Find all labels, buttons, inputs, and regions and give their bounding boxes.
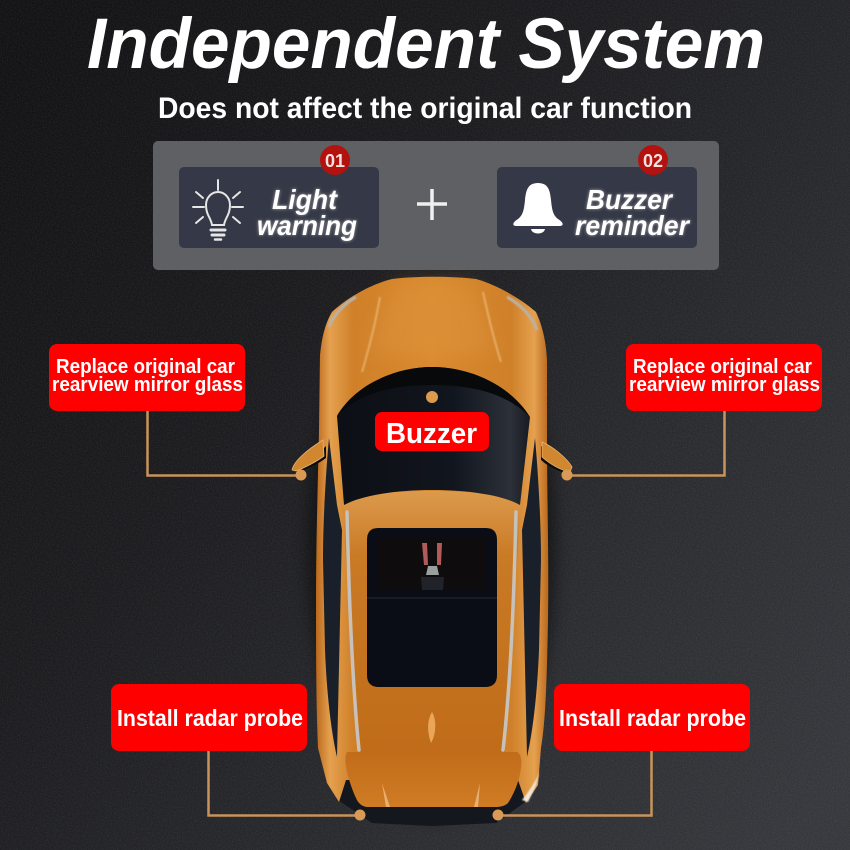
windshield [337,367,530,505]
hood highlight [368,283,495,358]
callout: left mirror [49,344,245,411]
side windows [323,438,541,757]
callout: right radar probe: Install radar probe [559,705,746,731]
connector: top left [148,411,306,480]
card: light warning [179,167,379,248]
callout: right mirror: rearview mirror glass [629,373,820,396]
callout: right mirror [626,344,822,411]
card: buzzer reminder [497,167,697,248]
rear corner highlight [522,770,540,802]
icon: bell [513,183,563,234]
icon: plus [417,189,447,220]
badge: 02: 02 [643,151,663,171]
callout: left mirror: rearview mirror glass [52,373,243,396]
car body [316,277,548,803]
connector: bottom right [492,751,652,820]
label: buzzer reminder: Buzzer [586,184,674,215]
roof [343,491,521,752]
shark fin antenna [428,712,435,743]
rear light streaks [382,783,480,807]
car [292,277,572,826]
sunroof [367,528,497,687]
callout: left radar probe: Install radar probe [117,705,303,731]
label: light warning [257,184,357,241]
roof rails [347,512,516,750]
subtitle: Does not affect the original car function [158,92,692,125]
right mirror [541,442,572,474]
callout: left mirror: Replace original car [56,355,235,378]
label: buzzer reminder [575,184,691,241]
label: light warning: Light [272,184,339,215]
trunk [345,752,521,807]
rear bumper [338,770,528,826]
callout: left radar probe [111,684,307,751]
callout: buzzer: Buzzer [386,418,477,450]
badge: 01: 01 [325,151,345,171]
connector: top right [562,411,724,480]
headlights [329,297,537,330]
badge: 02 [638,145,668,175]
badge: 01 [320,145,350,175]
label: light warning: warning [257,210,357,241]
callout: right radar probe [554,684,750,751]
seat pillar detail [422,543,442,565]
panel: warning methods [153,141,719,270]
title: Independent System [87,5,765,84]
callout: right mirror: Replace original car [633,355,812,378]
wiper cowl [337,367,530,417]
connector: bottom left [208,751,366,820]
car shadow [308,282,556,818]
left mirror [292,440,326,472]
hood creases [362,292,501,372]
label: buzzer reminder: reminder [575,210,691,241]
callout: buzzer [375,412,489,451]
icon: light bulb [193,180,243,240]
dot: buzzer position [426,391,438,403]
